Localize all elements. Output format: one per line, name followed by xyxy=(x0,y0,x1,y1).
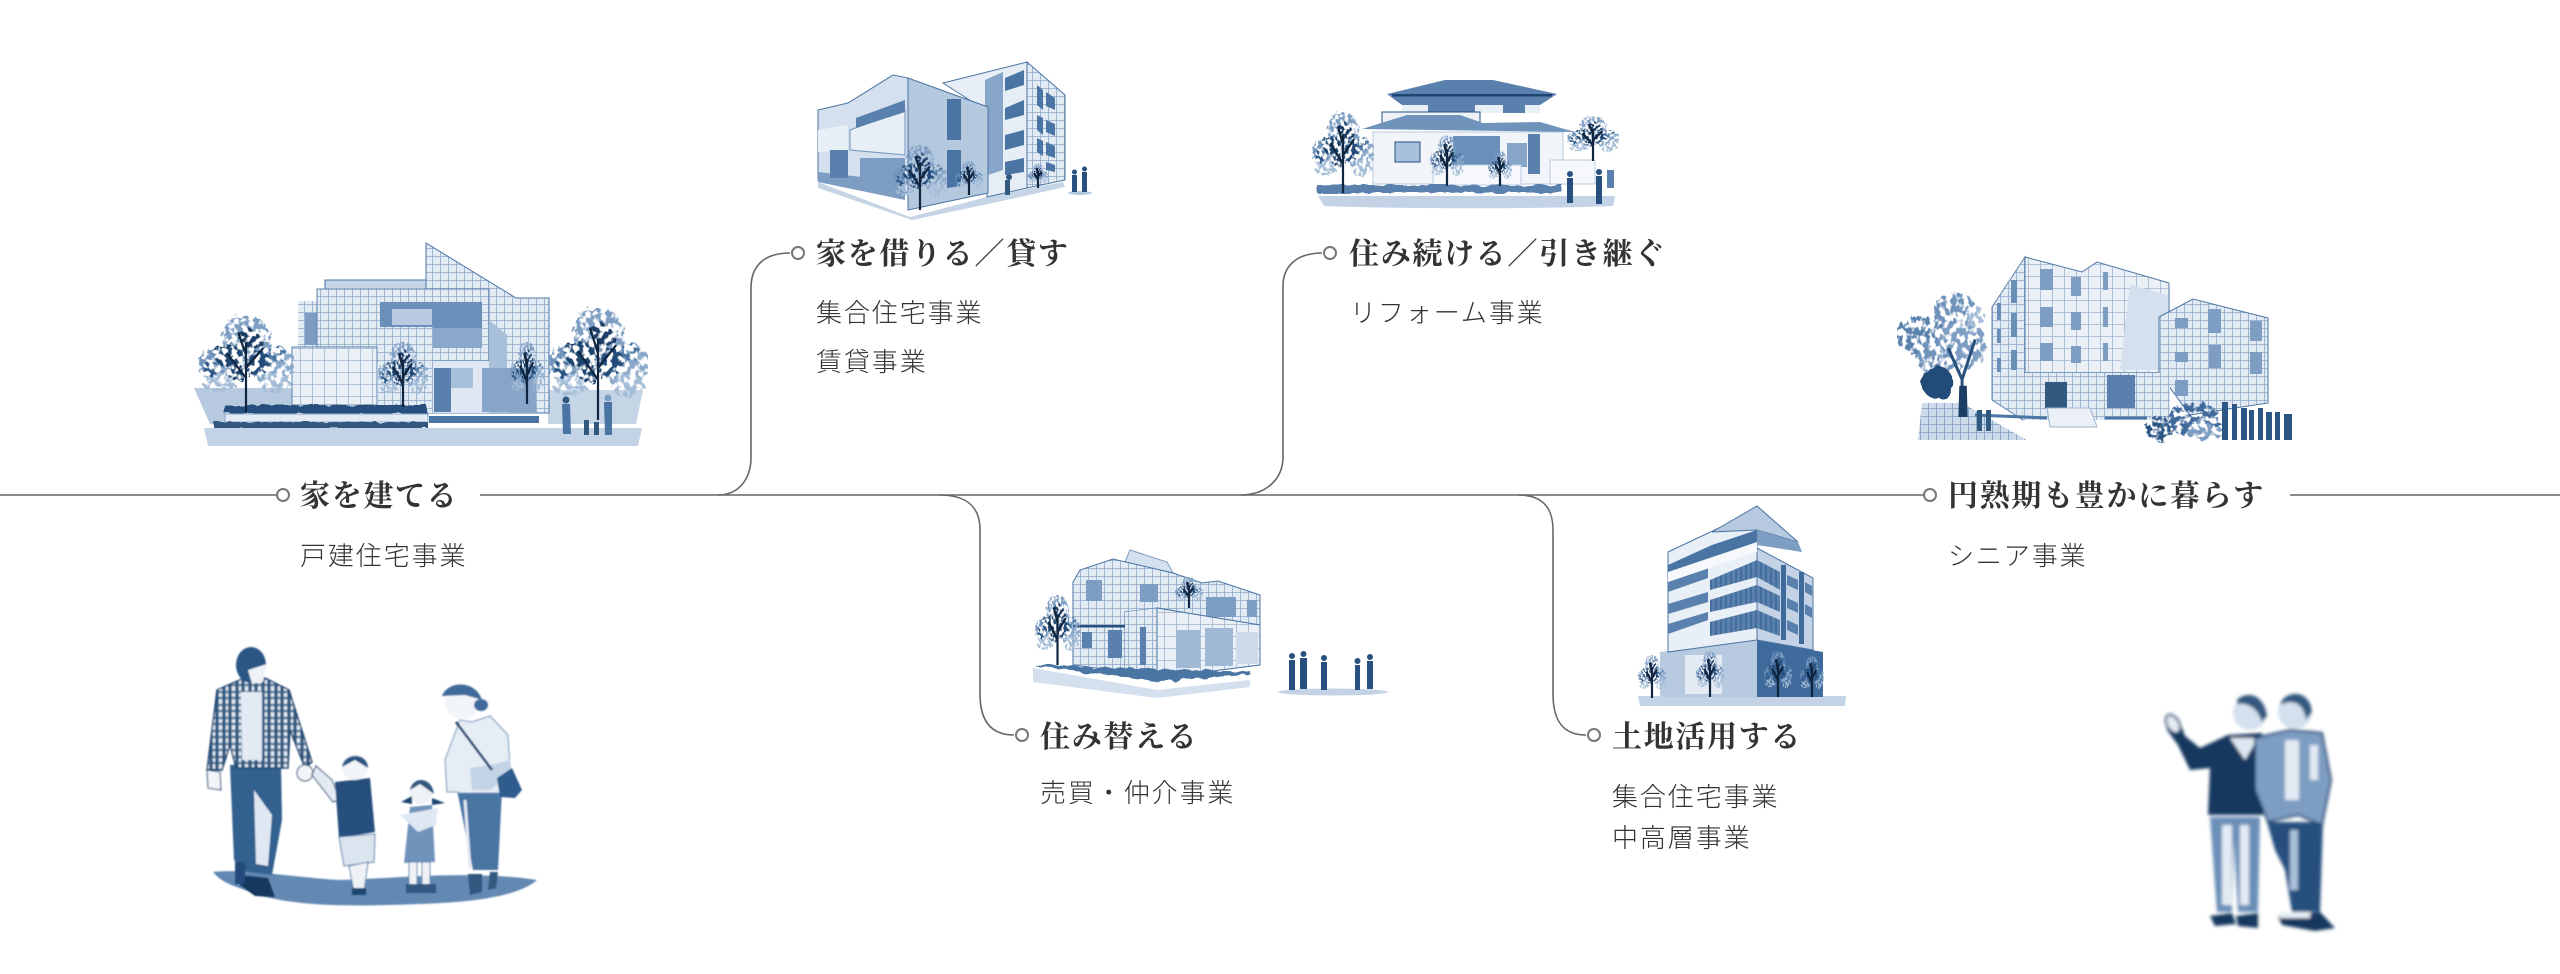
heading: keep living: 住み続ける／引き継ぐ xyxy=(1349,238,1666,271)
illustration: mid-rise building xyxy=(1638,506,1846,706)
heading: land use: 集合住宅事業 xyxy=(1612,782,1779,812)
heading: rent a house: 賃貸事業 xyxy=(816,347,928,377)
mother xyxy=(442,684,522,895)
connector lines xyxy=(0,253,2560,735)
left man xyxy=(2163,695,2267,928)
heading: keep living xyxy=(1324,238,1666,328)
illustration: apartment building xyxy=(818,62,1092,220)
illustration: family walking xyxy=(207,647,537,905)
heading: rent a house: 集合住宅事業 xyxy=(816,298,983,328)
heading: move house xyxy=(1016,721,1235,808)
illustration: senior couple xyxy=(2163,694,2335,931)
heading: move house: 住み替える xyxy=(1040,721,1198,754)
illustration: detached house xyxy=(194,243,650,446)
boy xyxy=(312,754,375,895)
girl xyxy=(400,780,445,893)
heading: build a house xyxy=(277,480,467,571)
heading: keep living: リフォーム事業 xyxy=(1350,298,1545,328)
heading: rent a house xyxy=(792,238,1070,377)
illustration: resale house xyxy=(1033,550,1388,698)
heading: build a house: 家を建てる xyxy=(300,480,458,513)
illustration: senior residence xyxy=(1895,257,2292,441)
heading: move house: 売買・仲介事業 xyxy=(1040,778,1235,808)
ground shadow xyxy=(213,871,537,905)
heading: land use xyxy=(1588,721,1802,853)
heading: mature years: シニア事業 xyxy=(1948,541,2088,571)
illustration: traditional house renovation xyxy=(1312,80,1620,208)
heading: mature years xyxy=(1924,480,2265,571)
heading: build a house: 戸建住宅事業 xyxy=(300,541,467,571)
heading: rent a house: 家を借りる／貸す xyxy=(816,238,1070,271)
right man xyxy=(2255,694,2335,931)
heading: mature years: 円熟期も豊かに暮らす xyxy=(1948,480,2265,513)
heading: land use: 中高層事業 xyxy=(1612,823,1752,853)
heading: land use: 土地活用する xyxy=(1612,721,1802,754)
father xyxy=(207,647,313,897)
